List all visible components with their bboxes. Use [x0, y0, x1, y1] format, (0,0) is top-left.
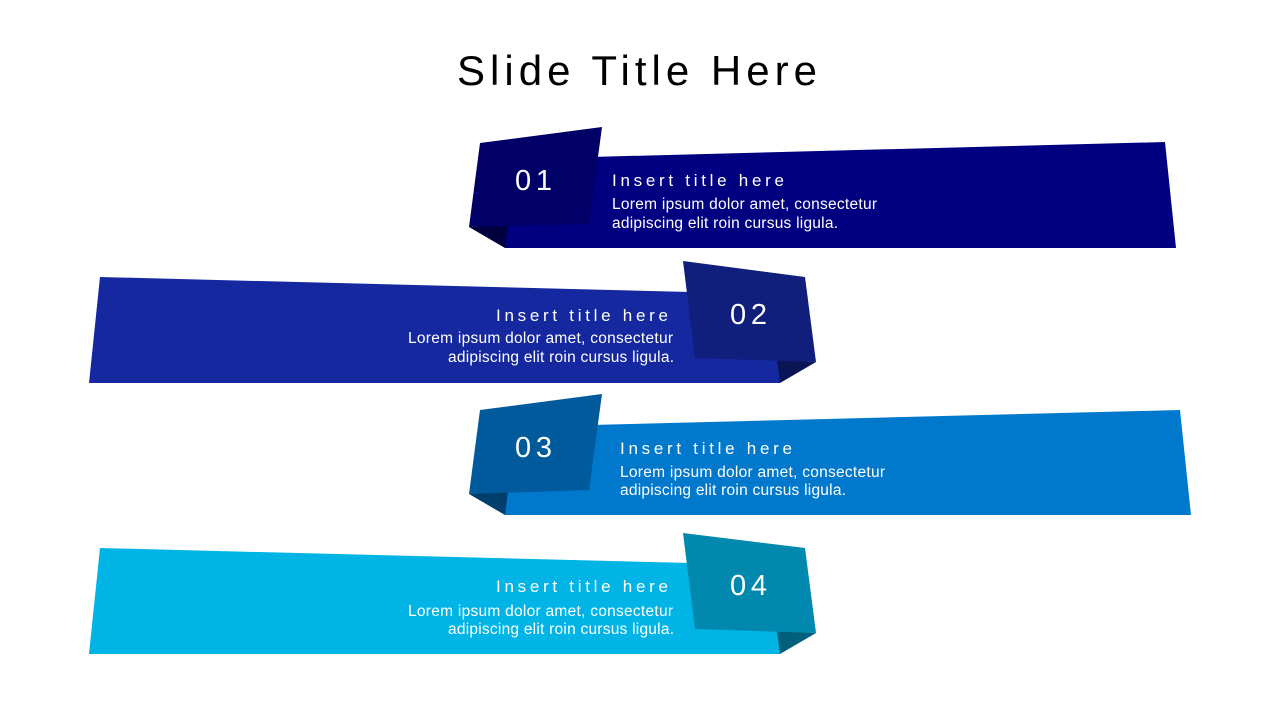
panel: item 04	[89, 533, 816, 654]
item body 02: adipiscing elit roin cursus ligula.	[448, 349, 674, 366]
panel: item 03	[469, 394, 1191, 515]
fold shadow 02	[777, 360, 816, 383]
item title 01: Insert title here	[612, 171, 784, 190]
number flap 03	[469, 394, 602, 494]
item title 04: Insert title here	[496, 577, 668, 596]
item body 04: Lorem ipsum dolor amet, consectetur	[408, 603, 673, 620]
number 04: 04	[730, 570, 767, 602]
ribbon band 03	[500, 410, 1191, 515]
ribbon band 01	[500, 142, 1176, 248]
number flap 02	[683, 261, 816, 362]
fold shadow 04	[777, 631, 816, 654]
title: Slide Title Here	[457, 47, 817, 94]
item body 02	[408, 330, 674, 366]
item body 03: Lorem ipsum dolor amet, consectetur	[620, 464, 885, 481]
item title 02: Insert title here	[496, 306, 668, 325]
fold shadow 01	[469, 225, 508, 248]
item body 03: adipiscing elit roin cursus ligula.	[620, 482, 846, 499]
item body 02: Lorem ipsum dolor amet, consectetur	[408, 330, 673, 347]
item body 04: adipiscing elit roin cursus ligula.	[448, 621, 674, 638]
item body 01: adipiscing elit roin cursus ligula.	[612, 215, 838, 232]
number 01: 01	[515, 165, 552, 197]
panel: item 01	[469, 127, 1176, 248]
ribbon band 04	[89, 548, 785, 654]
item body 01	[612, 196, 877, 232]
item body 03	[620, 464, 885, 499]
number 03: 03	[515, 432, 552, 464]
item title 03: Insert title here	[620, 439, 792, 458]
panel: item 02	[89, 261, 816, 383]
ribbon band 02	[89, 277, 785, 383]
item body 04	[408, 603, 674, 638]
number 02: 02	[730, 299, 767, 331]
number flap 04	[683, 533, 816, 633]
item body 01: Lorem ipsum dolor amet, consectetur	[612, 196, 877, 213]
number flap 01	[469, 127, 602, 227]
fold shadow 03	[469, 491, 508, 515]
